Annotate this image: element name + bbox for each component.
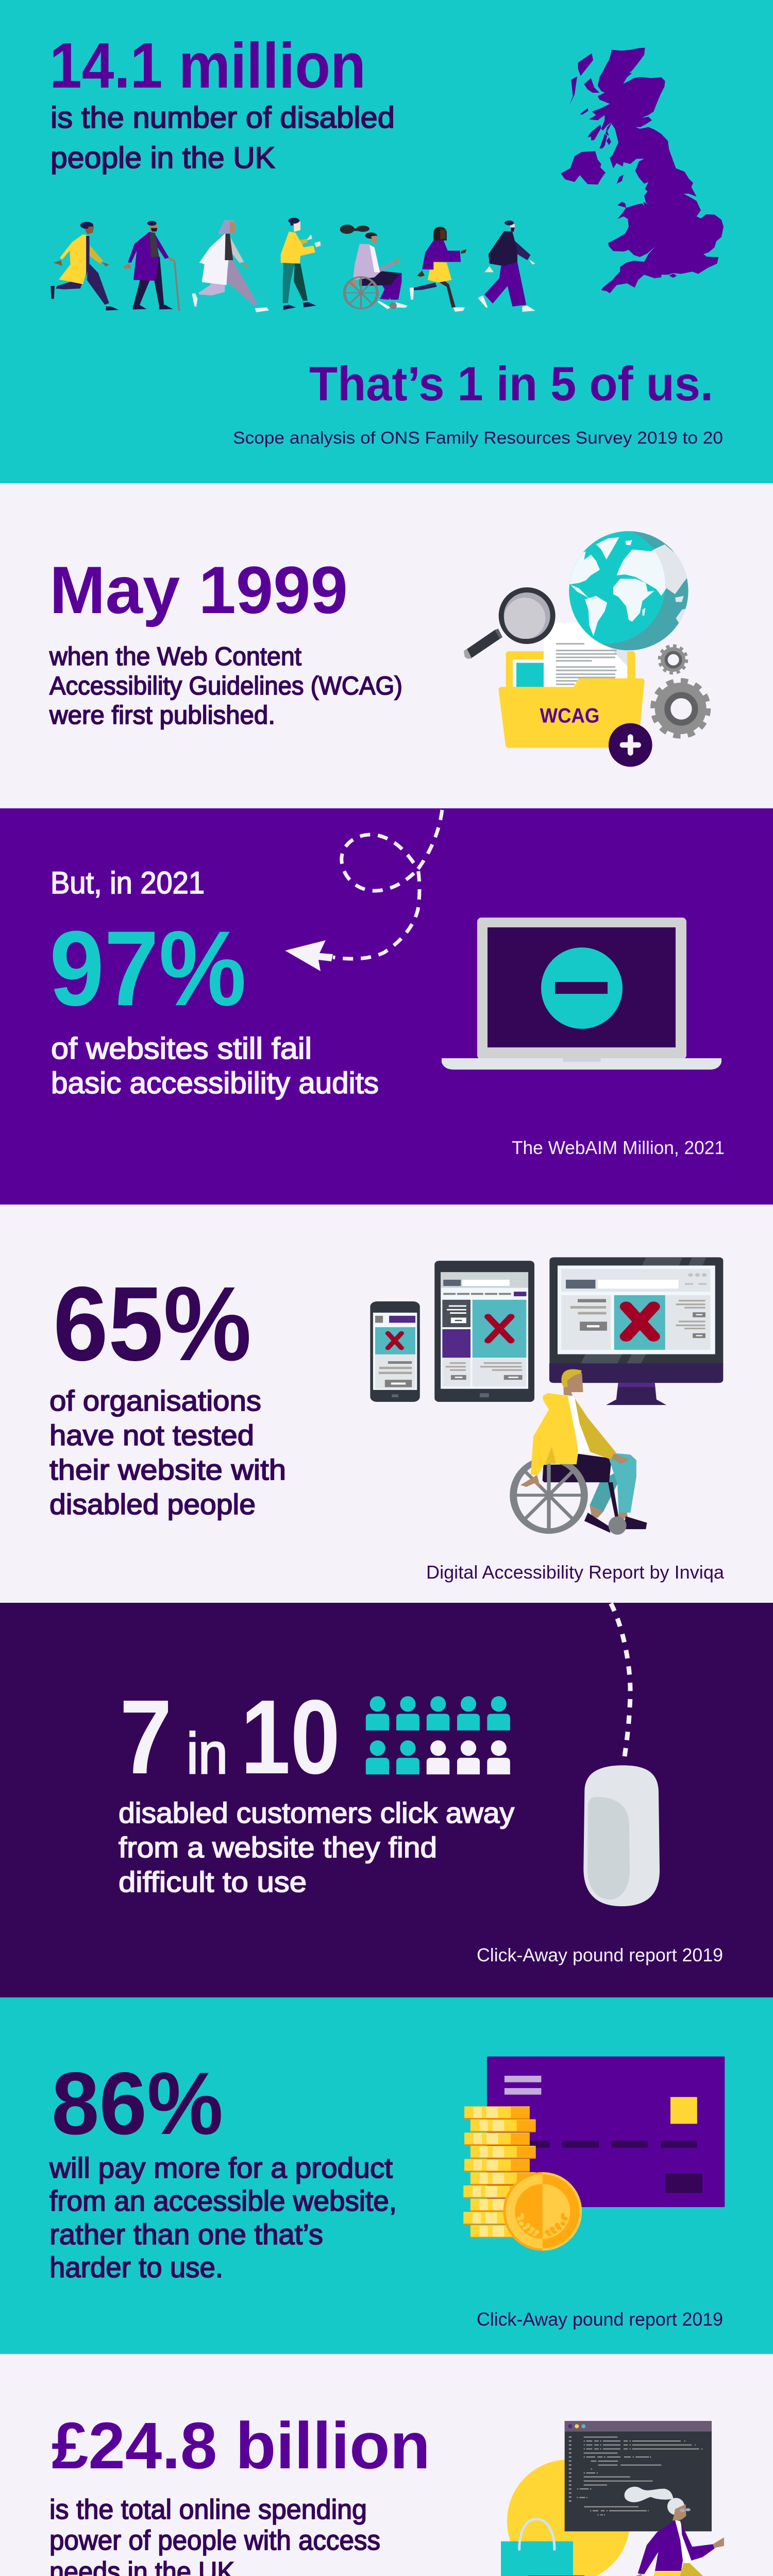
text: have not tested with disabled people: have not tested — [49, 1419, 254, 1451]
text: click away from a website — [119, 1797, 514, 1898]
text: is the number of disabled people in the UK — [51, 101, 395, 175]
statistic: 7 in 10: 10 — [241, 1678, 340, 1796]
text: will pay more for a product — [49, 2151, 397, 2283]
heading: May 1999: May 1999 — [49, 552, 348, 628]
person: white coat and hijab — [192, 220, 269, 312]
text: of websites still fail basic accessibility audits — [51, 1032, 379, 1100]
person: purple coat with cane — [123, 221, 179, 311]
illustration: credit card and coins — [463, 2057, 725, 2251]
text: click away from a website: disabled customers click away — [119, 1797, 514, 1829]
icon: phone — [370, 1301, 420, 1402]
text: have not tested with disabled people: their website with — [49, 1453, 286, 1486]
text: total online spending power: is the total online spending — [49, 2494, 367, 2525]
statistic: 7 in 10 — [120, 1678, 340, 1796]
text: have not tested with disabled people: disabled people — [49, 1488, 256, 1520]
statistic: 7 in 10: 7 — [120, 1678, 172, 1796]
illustration: group of seven diverse people walking — [51, 218, 535, 312]
text: when WCAG were first published: Accessibility Guidelines (WCAG) — [49, 671, 402, 700]
text: is the number of disabled people in the UK: people in the UK — [51, 141, 275, 175]
text: when WCAG were first published: were first published. — [49, 701, 275, 730]
person: wheelchair user with ponytail — [340, 225, 407, 309]
panel: 65% of organisations — [0, 1205, 773, 1603]
icon: small gear — [660, 646, 686, 673]
text: is the number of disabled people in the UK: is the number of disabled — [51, 101, 395, 134]
credit card — [487, 2057, 725, 2207]
text: total online spending power — [49, 2494, 380, 2576]
illustration: devices and wheelchair user — [370, 1257, 723, 1535]
person: yellow jumper — [281, 218, 321, 310]
folder back — [506, 651, 635, 689]
source: Scope analysis: Scope analysis of ONS Family Resources Survey 2019 to 20 — [233, 428, 723, 447]
source: WebAIM Million: The WebAIM Million, 2021 — [512, 1137, 725, 1158]
text: click away from a website: from a website they find — [119, 1831, 437, 1863]
document — [544, 622, 627, 688]
panel: 7 in 10 disabled customers — [0, 1603, 773, 1997]
illustration: computer mouse with dashed cable — [583, 1603, 660, 1906]
illustration: WCAG folder, globe, magnifier and gears — [464, 526, 708, 767]
text: will pay more for a product: from an accessible website, — [49, 2184, 397, 2217]
text: have not tested with disabled people — [49, 1384, 286, 1520]
arrow: dashed looping cursor path — [285, 810, 442, 971]
globe — [569, 531, 688, 650]
illustration: laptop with no-entry symbol — [442, 918, 721, 1070]
person: woman with white hair and glasses — [625, 2487, 724, 2576]
person: running with prosthetic leg — [410, 227, 466, 312]
panel: 24.8 billion spending power — [0, 2354, 773, 2576]
code window — [565, 2421, 712, 2531]
illustration: online shopper with code window and bags — [501, 2421, 724, 2576]
text: But, in 2021: But, in 2021 — [51, 866, 205, 900]
text: when WCAG were first published: when the Web Content — [49, 642, 301, 671]
purple shopping bag — [528, 2575, 584, 2576]
text: when WCAG were first published — [49, 642, 402, 730]
text: have not tested with disabled people: of organisations — [49, 1384, 261, 1417]
text: will pay more for a product: rather than one that’s — [49, 2218, 323, 2250]
statistic: 7 in 10: in — [187, 1721, 228, 1786]
text: click away from a website: difficult to use — [119, 1866, 307, 1898]
coin stack — [463, 2106, 536, 2238]
person: yellow coat — [51, 222, 119, 311]
callout: That's 1 in 5 of us: That’s 1 in 5 of us. — [309, 357, 713, 411]
statistic: 86%: 86% — [52, 2054, 223, 2153]
heading: 14.1 million: 14.1 million — [49, 30, 366, 101]
icon: tablet — [434, 1261, 534, 1402]
panel: 14.1 million disabled people — [0, 0, 773, 483]
statistic: 97%: 97% — [49, 909, 246, 1028]
large coin — [503, 2172, 582, 2251]
person: wheelchair user in yellow hoodie — [513, 1369, 647, 1535]
person: dark jumper and purple trousers — [478, 221, 535, 312]
icon: large gear — [653, 681, 708, 736]
magnifying glass — [464, 590, 553, 659]
statistic: 65%: 65% — [53, 1265, 251, 1383]
icon: plus — [609, 723, 652, 767]
text: of websites still fail basic accessibility audits: of websites still fail — [51, 1032, 312, 1065]
teal shopping bag — [501, 2519, 573, 2576]
panel: May 1999 WCAG — [48, 531, 711, 767]
source: Click-Away pound: Click-Away pound report 2019 — [477, 1944, 723, 1965]
text: total online spending power: power of people with access — [49, 2525, 380, 2556]
text: will pay more for a product: will pay more for a product — [49, 2151, 393, 2184]
text: will pay more for a product: harder to use. — [49, 2251, 223, 2283]
source: Digital Accessibility Report: Digital Accessibility Report by Inviqa — [426, 1562, 725, 1583]
folder front — [498, 679, 645, 748]
heading: £24.8 billion: £24.8 billion — [52, 2409, 430, 2483]
icon: desktop monitor — [549, 1257, 723, 1405]
panel: 86% will pay more — [0, 1997, 773, 2354]
folder front: WCAG — [540, 704, 599, 727]
text: of websites still fail basic accessibility audits: basic accessibility audits — [51, 1066, 379, 1100]
source: Click-Away pound: Click-Away pound report 2019 — [477, 2309, 723, 2330]
map: United Kingdom — [561, 48, 724, 293]
yellow circle — [507, 2460, 630, 2576]
panel: 97% of websites fail — [0, 808, 773, 1205]
icon array: 7 of 10 people highlighted — [366, 1696, 510, 1774]
